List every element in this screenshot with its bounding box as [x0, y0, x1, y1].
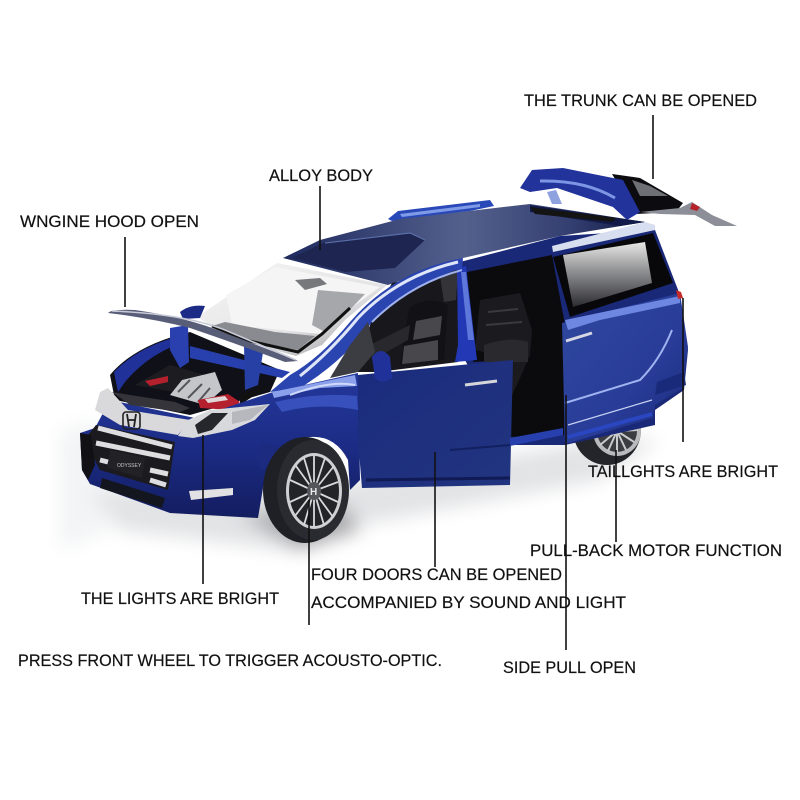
callout: trunk: THE TRUNK CAN BE OPENED [524, 91, 757, 110]
rear sliding door [562, 293, 688, 444]
front door sill [510, 428, 563, 446]
front interior and seat [352, 268, 460, 372]
interior between door openings [467, 255, 566, 437]
front sliding door [358, 360, 513, 488]
B pillar [455, 266, 477, 362]
fog light [189, 488, 233, 500]
rear window [552, 222, 673, 317]
A pillar [270, 258, 463, 392]
front wheel: H [310, 487, 317, 498]
callout: pull-back motor: PULL-BACK MOTOR FUNCTION [530, 541, 782, 560]
ground shadow [60, 420, 660, 552]
roof rails [388, 200, 494, 221]
open tailgate [520, 168, 737, 226]
callout: alloy body: ALLOY BODY [269, 166, 373, 185]
callout: front wheel trigger: PRESS FRONT WHEEL TO TRIGGER ACOUSTO-OPTIC. [18, 651, 442, 670]
grille chrome: ODYSSEY [117, 463, 142, 469]
callout: side pull: SIDE PULL OPEN [503, 658, 636, 677]
callout: alloy body [269, 166, 373, 250]
side body behind doors [460, 230, 688, 445]
car: model MPV with open doors [80, 168, 737, 543]
grille chrome [80, 388, 190, 508]
open hood [108, 310, 298, 362]
callout: engine hood: WNGINE HOOD OPEN [20, 212, 199, 231]
front fender and bumper [80, 373, 360, 518]
callout: four doors: FOUR DOORS CAN BE OPENED [311, 565, 562, 584]
roof [283, 204, 645, 285]
hood struts [170, 325, 263, 390]
headlight [178, 404, 270, 438]
callout: lights: THE LIGHTS ARE BRIGHT [81, 589, 279, 608]
front wheel [263, 437, 349, 543]
callout: four doors [311, 452, 626, 612]
taillight [676, 290, 683, 299]
door handle [465, 381, 497, 385]
engine bay [110, 332, 290, 415]
callout: four doors: ACCOMPANIED BY SOUND AND LIGHT [311, 593, 626, 612]
callout: taillights: TAILLGHTS ARE BRIGHT [588, 462, 778, 481]
windshield [197, 263, 387, 356]
side mirror [180, 306, 392, 382]
honda badge [123, 412, 140, 429]
rear wheel [573, 395, 641, 465]
